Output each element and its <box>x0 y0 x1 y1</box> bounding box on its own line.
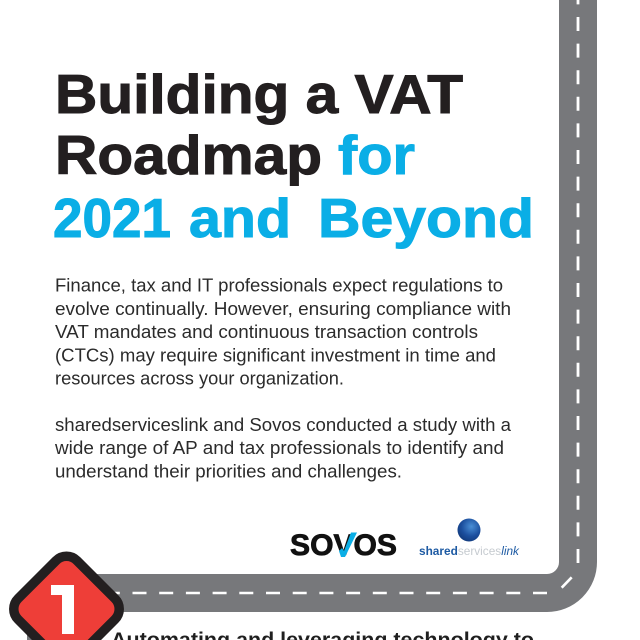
title <box>53 63 534 249</box>
study paragraph: wide range of AP and tax professionals to identify and <box>54 437 504 458</box>
icon: globe <box>458 518 480 542</box>
title: Building a VAT <box>55 63 463 125</box>
step 1 badge <box>8 550 125 640</box>
intro paragraph: evolve continually. However, ensuring compliance with <box>55 298 511 319</box>
logo: sharedserviceslink: sharedserviceslink <box>419 544 520 558</box>
logo: Sovos: SOVOS <box>290 529 397 562</box>
intro paragraph: resources across your organization. <box>55 368 344 388</box>
title: and <box>189 187 291 249</box>
title: for <box>338 124 415 186</box>
intro paragraph <box>55 274 511 388</box>
logo: sharedserviceslink <box>419 518 520 558</box>
title: 2021 <box>53 187 171 249</box>
intro paragraph: VAT mandates and continuous transaction controls <box>55 321 478 342</box>
study paragraph <box>54 414 512 482</box>
study paragraph: sharedserviceslink and Sovos conducted a study with a <box>55 414 512 435</box>
intro paragraph: (CTCs) may require significant investment in time and <box>55 344 496 366</box>
study paragraph: understand their priorities and challenges. <box>55 460 402 482</box>
title: Roadmap <box>55 124 322 186</box>
title: Beyond <box>318 187 534 249</box>
intro paragraph: Finance, tax and IT professionals expect regulations to <box>55 274 503 296</box>
